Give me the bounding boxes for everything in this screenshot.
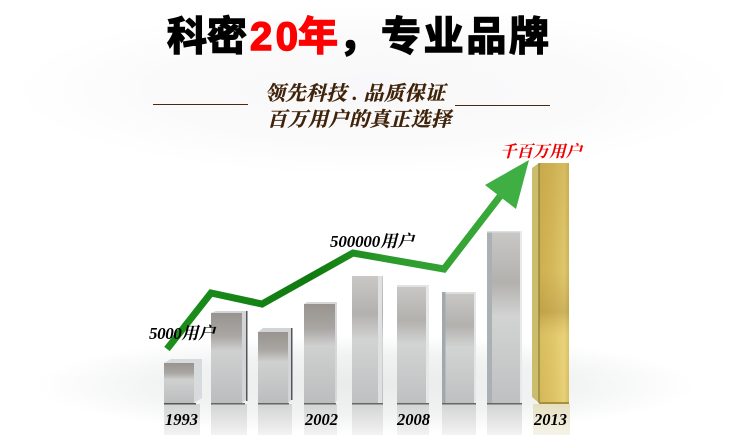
subtitle: 百万用户的真正选择 — [267, 108, 454, 131]
title: 专业品牌 — [381, 15, 549, 59]
title: 年 — [298, 15, 338, 59]
title: 20 — [250, 15, 298, 59]
right rule — [455, 105, 550, 106]
title: ， — [339, 15, 379, 59]
label: 千百万用户: 千百万用户 — [500, 142, 584, 161]
subtitle: 领先科技 . 品质保证 — [265, 82, 448, 105]
bar: 2002 — [304, 302, 337, 404]
bar: fifth — [352, 276, 383, 404]
label: 500000用户: 500000用户 — [330, 232, 416, 251]
floor — [35, 335, 695, 435]
background haze — [15, 5, 735, 175]
year: 1993: 1993 — [165, 410, 198, 429]
year: 2013: 2013 — [533, 410, 567, 429]
title: 科密 — [167, 15, 247, 59]
bar: 2013 gold — [532, 163, 569, 404]
bar: second — [211, 311, 248, 404]
year: 2008: 2008 — [396, 410, 430, 429]
bar: 1993 — [164, 359, 202, 404]
title — [167, 15, 549, 59]
growth arrow — [167, 160, 529, 349]
year: 2002: 2002 — [304, 410, 338, 429]
left rule — [153, 104, 248, 105]
bar: third — [258, 328, 292, 404]
bar reflections — [164, 404, 570, 435]
subtitle — [265, 82, 454, 131]
bar: 2008 — [397, 285, 429, 404]
bar: eighth — [487, 231, 522, 404]
label: 5000用户: 5000用户 — [149, 324, 217, 343]
bar: seventh — [442, 292, 476, 404]
